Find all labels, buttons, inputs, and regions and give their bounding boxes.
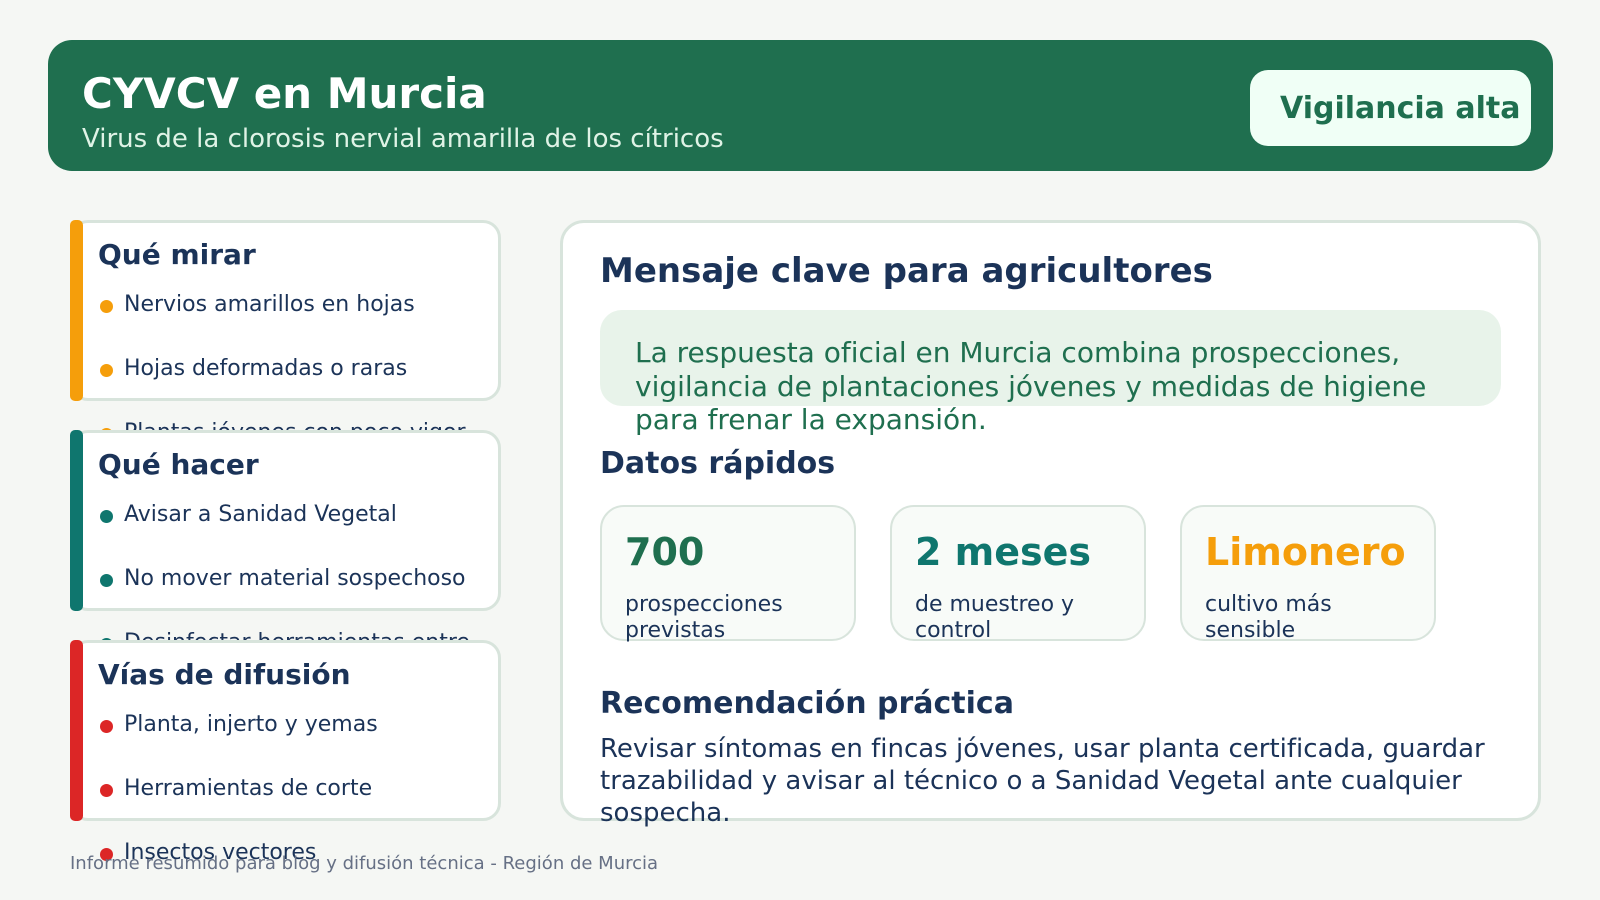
text: Plantas jóvenes con poco vigor [124, 420, 466, 445]
stat: 700 [600, 505, 856, 641]
text: Insectos vectores [124, 840, 316, 865]
stat: 2 meses [890, 505, 1146, 641]
callout text [635, 336, 1426, 436]
header banner [48, 40, 1553, 171]
stat: 700: previstas [625, 618, 725, 643]
text: para frenar la expansión. [635, 403, 987, 436]
status badge [1250, 70, 1531, 146]
text: Nervios amarillos en hojas [124, 292, 415, 317]
text: Planta, injerto y yemas [124, 712, 378, 737]
stat: 2 meses: 2 meses [915, 530, 1091, 574]
text: Desinfectar herramientas entre [124, 630, 470, 655]
panel: vías de difusión [70, 640, 501, 865]
callout [600, 310, 1501, 406]
text: Vías de difusión [98, 658, 351, 691]
footer: Informe resumido para blog y difusión técnica - Región de Murcia [70, 853, 658, 874]
subtitle: Virus de la clorosis nervial amarilla de los cítricos [82, 124, 724, 154]
text: No mover material sospechoso [124, 566, 466, 591]
text: Herramientas de corte [124, 776, 372, 801]
text: Hojas deformadas o raras [124, 356, 407, 381]
stat: limonero: Limonero [1205, 530, 1406, 574]
title: CYVCV en Murcia [82, 69, 487, 118]
text: sospecha. [600, 798, 730, 828]
stat: 2 meses: de muestreo y [915, 592, 1074, 617]
heading: mensaje clave: Mensaje clave para agricultores [600, 251, 1213, 291]
text: Revisar síntomas en fincas jóvenes, usar planta certificada, guardar [600, 734, 1485, 764]
status badge: Vigilancia alta [1280, 91, 1520, 126]
panel: qué mirar [70, 220, 501, 445]
stat: limonero: sensible [1205, 618, 1295, 643]
text: Avisar a Sanidad Vegetal [124, 502, 397, 527]
text: Qué hacer [98, 448, 259, 481]
stat: 2 meses: control [915, 618, 991, 643]
stat: limonero [1180, 505, 1436, 641]
text: trazabilidad y avisar al técnico o a Sanidad Vegetal ante cualquier [600, 766, 1462, 796]
text: vigilancia de plantaciones jóvenes y medidas de higiene [635, 370, 1426, 403]
heading: recomendación práctica: Recomendación práctica [600, 686, 1014, 721]
recommendation text [600, 734, 1485, 828]
text: La respuesta oficial en Murcia combina prospecciones, [635, 336, 1400, 369]
stat: 700: 700 [625, 530, 704, 574]
panel: qué hacer [70, 430, 501, 655]
panel: mensaje clave [560, 220, 1541, 821]
stat: 700: prospecciones [625, 592, 783, 617]
text: Qué mirar [98, 238, 256, 271]
stat: limonero: cultivo más [1205, 592, 1332, 617]
heading: datos rápidos: Datos rápidos [600, 446, 835, 481]
